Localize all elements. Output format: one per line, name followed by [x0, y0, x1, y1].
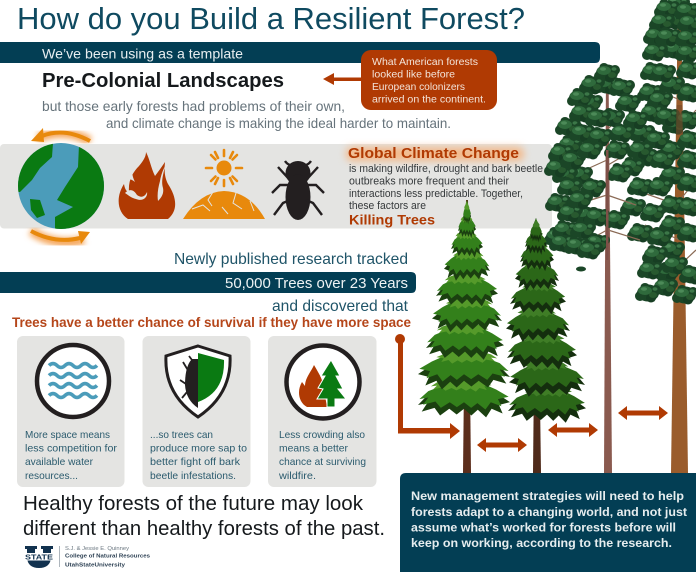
closing statement: Healthy forests of the future may look [23, 493, 364, 515]
title: How do you Build a Resilient Forest? [17, 2, 525, 36]
logo: Utah State University: S.J. & Jessie E. Quinney [65, 546, 130, 552]
card text: chance at surviving [279, 456, 366, 468]
intro text: and climate change is making the ideal harder to maintain. [106, 115, 451, 131]
card text: beetle infestations. [150, 470, 236, 482]
label glow: global climate change [346, 147, 524, 161]
top banner [0, 42, 600, 63]
callout text: What American forests [372, 56, 478, 68]
card: wildfire [268, 336, 376, 487]
card text: better fight off bark [150, 456, 241, 468]
arrow: spacing between fir and pine [548, 423, 598, 437]
card text [25, 429, 117, 482]
card text: resources... [25, 470, 78, 482]
card text [278, 429, 366, 482]
and discovered that: and discovered that [272, 298, 409, 315]
banner text: 50,000 Trees over 23 Years [225, 275, 408, 292]
heading: pre-colonial landscapes: Pre-Colonial Landscapes [42, 70, 284, 92]
icon: flame [119, 152, 175, 219]
callout: what American forests looked like [361, 50, 497, 110]
panel text: forests adapt to a changing world, and not just [411, 505, 687, 519]
banner text: We’ve been using as a template [42, 46, 243, 62]
icon: water waves [37, 345, 109, 417]
card text [150, 429, 247, 482]
arrow: connector from finding to trees [395, 334, 460, 439]
callout text [372, 56, 486, 106]
card text: wildfire. [278, 470, 316, 482]
icon: globe with rotating arrows [18, 128, 104, 246]
climate change heading: Global Climate Change [348, 146, 519, 162]
card text: produce more sap to [150, 442, 247, 454]
icon: bark beetle [272, 161, 324, 220]
climate change body text [349, 163, 543, 212]
climate change body text: interactions less predictable. Together, [349, 188, 523, 200]
card text: Less crowding also [279, 429, 365, 441]
icon: flame and tree [286, 346, 360, 418]
panel text: keep on working, according to the research. [411, 536, 672, 550]
card: water [17, 336, 124, 487]
climate change body text: these factors are [349, 200, 426, 212]
card text: available water [25, 456, 93, 468]
panel: new management strategies [400, 473, 696, 572]
illustration: tall pine tree [544, 63, 653, 473]
icon: shield with beetle [166, 346, 230, 417]
logo: Utah State University: STATE [25, 552, 53, 562]
arrow: callout to heading [323, 73, 362, 85]
panel text: assume what’s worked for forests before will [411, 520, 676, 534]
arrow: spacing between firs [477, 438, 527, 452]
closing statement: different than healthy forests of the past. [23, 518, 385, 540]
card: sap defence [142, 336, 250, 487]
intro text [42, 98, 451, 131]
logo: Utah State University [24, 546, 150, 568]
illustration: large pine tree, far right [619, 0, 696, 473]
closing statement [23, 493, 385, 540]
finding headline: Trees have a better chance of survival if they have more space [12, 314, 411, 330]
callout text: looked like before [372, 68, 455, 80]
card text: More space means [25, 429, 110, 441]
killing trees heading: Killing Trees [349, 212, 435, 228]
panel text: New management strategies will need to help [411, 489, 684, 503]
research banner [0, 272, 416, 293]
climate change body text: is making wildfire, drought and bark beetle [349, 163, 543, 175]
research intro text: Newly published research tracked [174, 251, 408, 268]
callout text: European colonizers [372, 81, 465, 93]
card text: ...so trees can [150, 429, 213, 441]
card text: less competition for [25, 442, 117, 454]
illustration: fir tree, right [506, 218, 586, 473]
icon: sun over cracked earth [183, 150, 265, 219]
panel: global climate change [0, 128, 552, 244]
logo: Utah State University: UtahStateUniversity [65, 562, 126, 568]
card text: means a better [279, 442, 348, 454]
intro text: but those early forests had problems of their own, [42, 98, 345, 114]
callout text: arrived on the continent. [372, 94, 486, 106]
climate change body text: outbreaks more frequent and their [349, 176, 509, 188]
arrow: spacing between pines [618, 406, 668, 420]
logo: Utah State University: College of Natural Resources [65, 554, 150, 560]
illustration: fir tree, left [418, 200, 510, 473]
panel text [411, 489, 687, 550]
